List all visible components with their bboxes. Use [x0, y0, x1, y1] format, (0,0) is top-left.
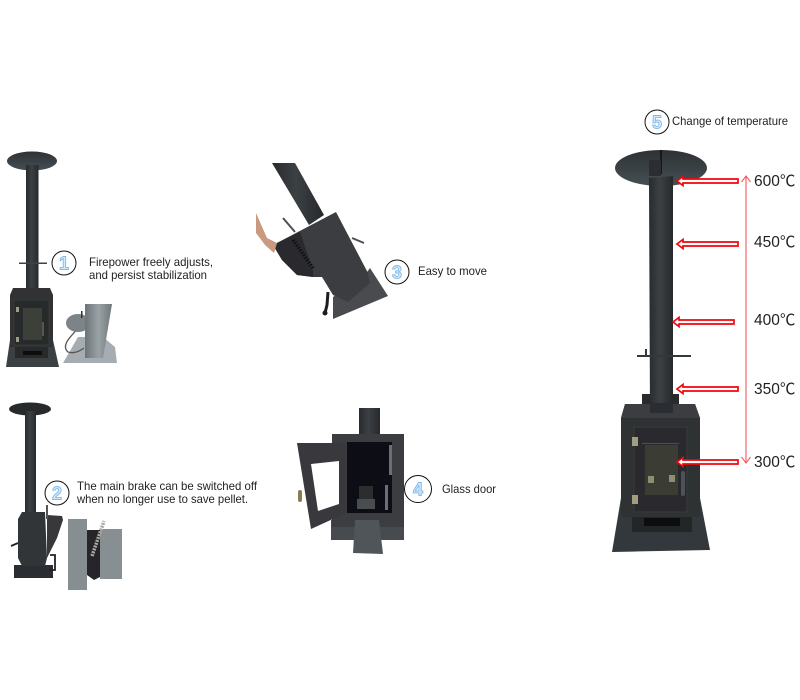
tilted stove [256, 163, 388, 319]
arrow: 400 [673, 318, 734, 326]
temperature labels: 400℃ [754, 312, 795, 329]
text: main brake [76, 479, 258, 506]
text: main brake: when no longer use to save pellet. [76, 492, 248, 506]
stove 1 [6, 152, 59, 367]
text: firepower: and persist stabilization [89, 268, 207, 282]
circle number 1: 1 [59, 254, 69, 274]
text: easy to move: Easy to move [418, 264, 487, 278]
panel: feature 5 change of temperature [612, 110, 795, 552]
circle number 2 [45, 481, 69, 505]
text: firepower: Firepower freely adjusts, [89, 255, 213, 269]
inset: brake detail [68, 519, 122, 590]
text: main brake: The main brake can be switched off [77, 479, 258, 493]
arrow: 300 [677, 458, 738, 466]
text: firepower [89, 255, 213, 282]
circle number 1 [52, 251, 76, 275]
stove 2 side view [9, 402, 63, 578]
circle number 2: 2 [52, 484, 62, 504]
text: glass door: Glass door [442, 482, 496, 496]
circle number 3: 3 [392, 262, 402, 282]
panel: feature 3 easy to move [256, 163, 487, 319]
arrow: temperature range [742, 176, 750, 463]
large stove [612, 150, 710, 552]
temperature labels: 600℃ [754, 173, 795, 190]
open door stove [297, 408, 404, 554]
temperature labels: 450℃ [754, 234, 795, 251]
arrow: 450 [677, 240, 738, 248]
panel: feature 1 firepower [6, 152, 213, 367]
text: change of temperature: Change of temperature [672, 114, 788, 128]
temperature labels: 350℃ [754, 381, 795, 398]
arrow: 350 [677, 384, 738, 394]
circle number 5: 5 [652, 112, 662, 132]
arrow: 600 [677, 176, 738, 186]
temperature labels: 300℃ [754, 454, 795, 471]
circle number 3 [385, 260, 409, 284]
circle number 4 [404, 476, 432, 502]
panel: feature 4 glass door [297, 408, 496, 554]
panel: feature 2 main brake [9, 402, 258, 590]
circle number 4: 4 [413, 480, 423, 500]
inset: damper detail [63, 304, 117, 363]
circle number 5 [645, 110, 669, 134]
temperature labels [754, 173, 795, 471]
